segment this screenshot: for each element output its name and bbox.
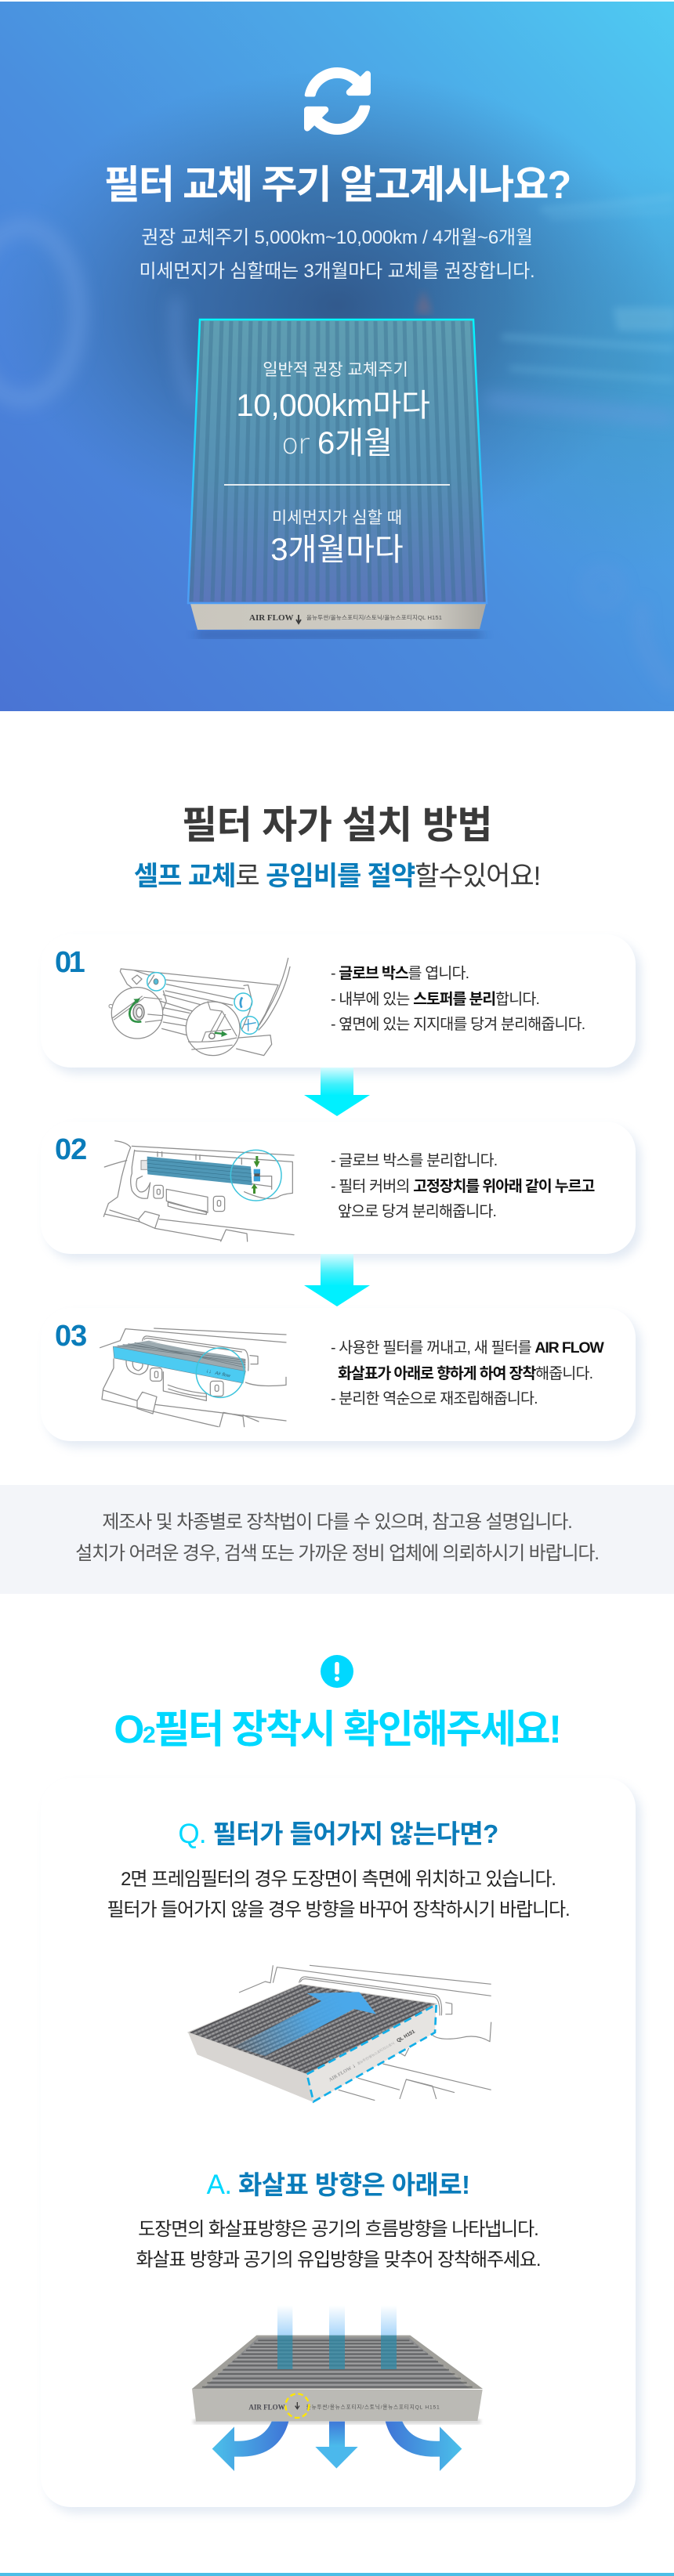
illustration: airflow through filter <box>192 2308 483 2471</box>
filter text: general cycle label: 일반적 권장 교체주기 <box>263 361 408 379</box>
illustration: new filter insertion <box>100 1328 287 1427</box>
step 01 text: - 옆면에 있는 지지대를 당겨 분리해줍니다. <box>331 1016 585 1033</box>
hero subtitle <box>140 227 534 282</box>
cyan filter: Air flow <box>214 1371 231 1379</box>
arrow: step 01 to 02 <box>304 1068 370 1116</box>
filter text: 3 months: 3개월마다 <box>270 533 404 567</box>
panel: step 01 <box>41 934 636 1068</box>
step 01 text: - 내부에 있는 스토퍼를 분리합니다. <box>331 990 539 1007</box>
panel: step 03 <box>41 1308 636 1441</box>
step 02 text: - 글로브 박스를 분리합니다. <box>331 1152 497 1169</box>
question heading: Q. 필터가 들어가지 않는다면? <box>178 1819 498 1849</box>
question body <box>107 1869 570 1920</box>
filter body: 올뉴투싼/올뉴스포티지/스토닉 <box>356 2040 396 2066</box>
highlight circles <box>147 973 259 1034</box>
icon: alert <box>321 1655 353 1688</box>
highlight circle <box>196 1348 245 1397</box>
step number 03: 03 <box>55 1320 86 1353</box>
arrow: step 02 to 03 <box>304 1254 370 1306</box>
step 02 text <box>331 1152 594 1220</box>
notice text <box>75 1512 599 1564</box>
answer body <box>136 2219 540 2271</box>
filter body: 올뉴투싼/올뉴스포티지/스토닉/올뉴스포티지QL H151 <box>306 2404 440 2411</box>
green press arrows <box>252 1156 260 1194</box>
teal filter cover <box>141 1157 260 1185</box>
question body: 필터가 들어가지 않을 경우 방향을 바꾸어 장착하시기 바랍니다. <box>107 1899 570 1920</box>
step 03 text: 화살표가 아래로 향하게 하여 장착해줍니다. <box>338 1364 592 1382</box>
magnifier lens: support <box>186 1001 240 1056</box>
step 02 text: 앞으로 당겨 분리해줍니다. <box>338 1203 496 1220</box>
step 01 text: - 글로브 박스를 엽니다. <box>331 965 469 982</box>
highlight circle <box>230 1150 281 1201</box>
yellow highlight <box>285 2394 309 2418</box>
filter body <box>188 1984 437 2102</box>
filter body: ↓ <box>351 2061 357 2069</box>
filter graphic: 올뉴투싼/올뉴스포티지/스토닉/올뉴스포티지QL H151 <box>306 613 442 621</box>
answer body: 도장면의 화살표방향은 공기의 흐름방향을 나타냅니다. <box>138 2219 538 2240</box>
step 02 text: - 필터 커버의 고정장치를 위아래 같이 누르고 <box>331 1178 594 1195</box>
cyan filter: ↓↓ <box>205 1367 212 1375</box>
notice text: 설치가 어려운 경우, 검색 또는 가까운 정비 업체에 의뢰하시기 바랍니다. <box>75 1543 599 1564</box>
hero subtitle: 미세먼지가 심할때는 3개월마다 교체를 권장합니다. <box>140 261 534 282</box>
bottom strip <box>0 2573 674 2576</box>
step 01 text <box>331 965 585 1033</box>
panel: Q and A card <box>41 1778 636 2507</box>
step 03 text: - 사용한 필터를 꺼내고, 새 필터를 AIR FLOW - 분리한 역순으로 재조립해줍니다. <box>331 1339 603 1407</box>
cyan filter <box>113 1341 245 1383</box>
hero subtitle: 권장 교체주기 5,000km~10,000km / 4개월~6개월 <box>141 227 533 248</box>
air inflow bars <box>277 2305 397 2369</box>
magnifier lens: clip <box>109 988 163 1039</box>
step number 01: 01 <box>55 946 82 979</box>
section title: O2필터 장착시 확인해주세요! <box>114 1707 560 1751</box>
notice text: 제조사 및 차종별로 장착법이 다를 수 있으며, 참고용 설명입니다. <box>102 1512 572 1533</box>
filter body <box>192 2336 483 2424</box>
filter body: AIR FLOW <box>328 2065 353 2083</box>
filter text: or 6 months: or 6개월 <box>281 426 393 461</box>
panel: self installation steps <box>47 804 643 1450</box>
hero title: 필터 교체 주기 알고계시나요? <box>104 163 570 207</box>
step number 02: 02 <box>55 1133 86 1166</box>
illustration: rotated filter <box>187 1964 492 2104</box>
answer heading: A. 화살표 방향은 아래로! <box>207 2170 469 2200</box>
question body: 2면 프레임필터의 경우 도장면이 측면에 위치하고 있습니다. <box>121 1869 556 1890</box>
icon: refresh arrows <box>304 67 371 135</box>
panel: step 02 <box>41 1122 636 1254</box>
panel: O2 filter checks <box>47 1655 643 2516</box>
filter text: heavy dust label: 미세먼지가 심할 때 <box>272 509 402 527</box>
outflow arrows <box>212 2422 462 2471</box>
filter graphic: AIR FLOW <box>249 613 294 623</box>
filter text: 10,000 km: 10,000km마다 <box>236 388 430 423</box>
hero background with blurred car interior <box>0 2 674 711</box>
filter divider <box>224 484 450 486</box>
section subtitle: 셀프 교체로 공임비를 절약할수있어요! <box>134 862 540 891</box>
answer body: 화살표 방향과 공기의 유입방향을 맞추어 장착해주세요. <box>136 2249 540 2271</box>
illustration: filter cover <box>103 1140 295 1242</box>
panel: hero replacement cycle <box>0 2 674 711</box>
filter body: QL H151 <box>396 2029 416 2043</box>
illustration: glove box stopper <box>108 957 291 1056</box>
panel: notice band <box>0 1485 674 1594</box>
section title: 필터 자가 설치 방법 <box>182 804 492 847</box>
filter graphic <box>187 318 487 639</box>
filter body: AIR FLOW <box>248 2403 285 2411</box>
